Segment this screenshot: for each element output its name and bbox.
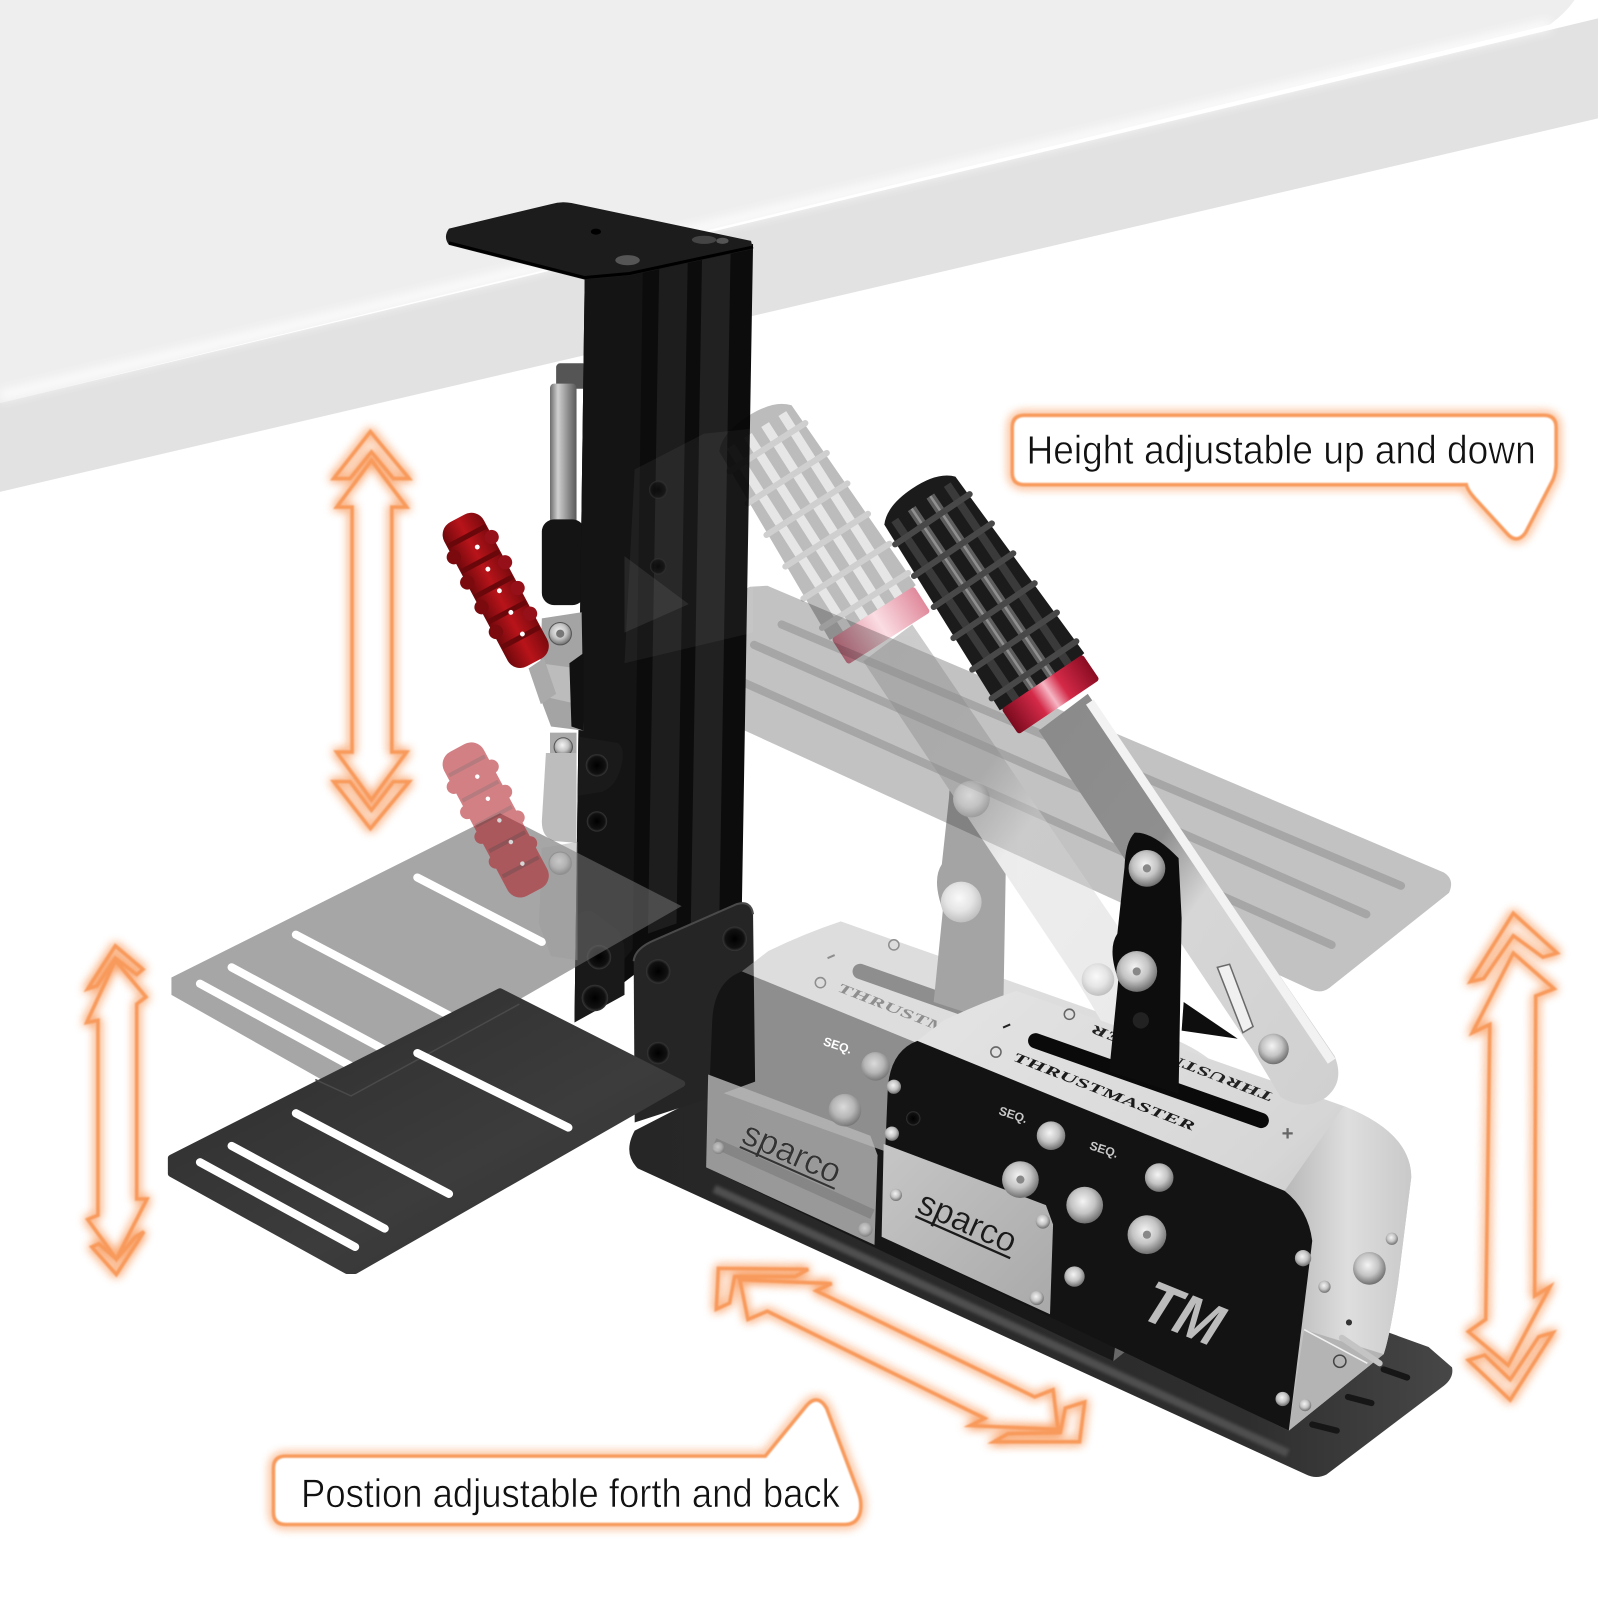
- lower chevron: [994, 1402, 1085, 1442]
- ghost link screws: [941, 781, 1114, 996]
- upper chevron: [88, 946, 143, 989]
- side panel screws: [885, 1080, 1398, 1411]
- SEQ labels: SEQ.: [997, 1104, 1029, 1126]
- ghost red clamp handle, lower position: [432, 734, 578, 960]
- arrow: shifter position: [716, 1268, 1085, 1442]
- ghost lever link: [934, 763, 1006, 1024]
- callout: position: [273, 1400, 861, 1524]
- ghost paddle plate: [633, 586, 1451, 991]
- callout outline: [273, 1400, 861, 1524]
- callout text: Height adjustable up and down: [1027, 428, 1536, 472]
- ghost panel screws: [712, 1052, 890, 1237]
- faint ghost overlay on column: [624, 429, 753, 663]
- double arrow: [1468, 953, 1554, 1365]
- upper brand text: THRUSTMASTER: [1089, 1021, 1276, 1105]
- ghost sparco label: sparco: [737, 1114, 847, 1191]
- column body: [574, 244, 753, 1020]
- cylinder and clamp spring: [542, 363, 587, 605]
- SEQ labels: [997, 1104, 1120, 1161]
- base plate: [629, 1090, 1452, 1477]
- end cap toggle: [1334, 1319, 1380, 1367]
- ghost dark screws on column: [649, 481, 667, 574]
- callout: height: [1012, 415, 1556, 539]
- ghost shifter slot: [860, 971, 1086, 1051]
- ghost plate underline: [740, 1147, 835, 1189]
- toggle clamp hardware: [539, 612, 584, 843]
- red ring: [1001, 654, 1100, 734]
- arrow: column height: [334, 432, 409, 829]
- desk: [0, 0, 1598, 492]
- ghost plate bands: [714, 1143, 872, 1214]
- column ridges: [574, 250, 731, 1020]
- upper chevron: [1470, 913, 1557, 982]
- clamp column assembly: [446, 202, 753, 1020]
- sparco plate: [882, 1144, 1053, 1314]
- ghost sparco plate: [706, 1052, 890, 1245]
- ghost SEQ label: SEQ.: [822, 1034, 854, 1057]
- upper chevron: [334, 432, 409, 479]
- sparco label: sparco: [912, 1184, 1023, 1261]
- ghost red handle: [432, 734, 559, 905]
- mounting plate, lower position: [171, 992, 682, 1270]
- handle grip: [432, 505, 559, 676]
- side panel: [882, 1041, 1312, 1431]
- rear strut: [1182, 1002, 1238, 1039]
- black knob with red ring: [870, 460, 1101, 736]
- silver housing: [917, 991, 1411, 1431]
- double arrow: [87, 960, 147, 1259]
- lower brand text: THRUSTMASTER: [1011, 1049, 1197, 1134]
- SEQ labels: SEQ.: [1088, 1139, 1120, 1161]
- ghost shifter: [706, 624, 1236, 1361]
- shifter: [882, 694, 1411, 1431]
- mid bracket: [578, 737, 623, 832]
- handle shank: [529, 658, 556, 704]
- callout outline: [1012, 415, 1556, 539]
- ghost brand text: THRUSTMASTER: [836, 980, 1022, 1064]
- desk top surface: [0, 0, 1574, 403]
- arrow: plate height: [87, 946, 147, 1274]
- double arrow: [740, 1280, 1058, 1430]
- arrow: shifter height: [1468, 913, 1557, 1400]
- top mounting plate: [446, 202, 753, 280]
- top marks: [991, 1009, 1074, 1057]
- ghost shifter silver housing: [742, 921, 1236, 1361]
- housing end cap: [1285, 1106, 1411, 1431]
- ghost lever arm: [863, 624, 1163, 1035]
- Thrustmaster logo: TM: [1134, 1267, 1234, 1360]
- plus mark: +: [1282, 1123, 1294, 1145]
- double arrow: [337, 460, 407, 800]
- top slot: [1036, 1041, 1261, 1120]
- desk front face: [0, 18, 1598, 492]
- lever arm: [1039, 694, 1338, 1105]
- ghost clamp hardware: [539, 842, 578, 960]
- ghost top marks: [815, 940, 899, 988]
- lower chevron: [1468, 1333, 1553, 1400]
- lever link: [1109, 833, 1182, 1094]
- callout text: Postion adjustable forth and back: [301, 1472, 840, 1516]
- red clamp handle: [432, 505, 559, 704]
- ghost mounting plate, upper position: [171, 813, 682, 1094]
- upper chevron: [716, 1268, 808, 1309]
- lower chevron: [334, 782, 409, 829]
- corner bracket: [574, 903, 755, 1122]
- ghost knob: [705, 389, 932, 666]
- ghost shifter side panel: [706, 971, 1137, 1361]
- lower chevron: [92, 1232, 144, 1274]
